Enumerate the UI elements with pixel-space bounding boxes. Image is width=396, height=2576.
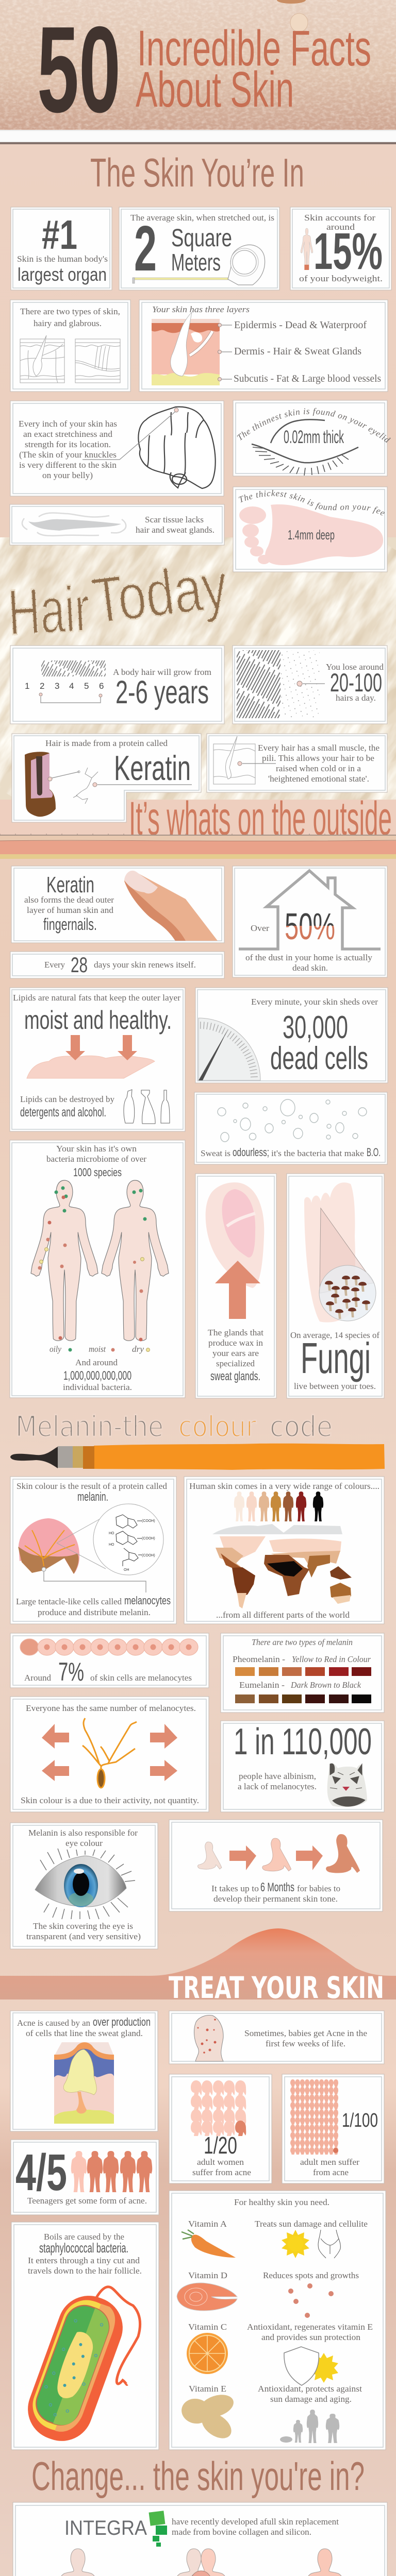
text block: your ears are xyxy=(212,1348,259,1358)
text: have recently developed afull skin replacement xyxy=(172,2517,339,2527)
text: Every minute, your skin sheds over xyxy=(251,997,378,1007)
text: Hair is made from a protein called xyxy=(45,738,168,748)
figure bottom half coloured: 50% xyxy=(285,906,335,947)
icon: bacterium xyxy=(19,2287,140,2450)
meters: Meters xyxy=(171,249,221,276)
vitamin E benefit: Antioxidant, protects against xyxy=(258,2384,362,2394)
panel: stretchiness and knuckles xyxy=(10,401,224,496)
legend: oily xyxy=(50,1344,61,1354)
text: bacteria microbiome of over xyxy=(46,1154,146,1164)
text: On average, 14 species of xyxy=(290,1330,380,1340)
caption: The average skin, when stretched out, is xyxy=(130,213,274,223)
arrow: up xyxy=(215,1261,260,1319)
arrow xyxy=(150,1724,177,1749)
vitamin C benefit: Antioxidant, regenerates vitamin E xyxy=(247,2322,373,2332)
icon: skin cells xyxy=(27,1056,155,1078)
diagram: glabrous skin xyxy=(75,339,120,383)
curved text: The thickest skin is found on your feet xyxy=(238,490,385,515)
label: subcutis: Subcutis - Fat & Large blood vessels xyxy=(234,373,381,384)
text: a lack of melanocytes. xyxy=(238,1782,317,1791)
icon: house xyxy=(239,871,381,949)
text: suffer from acne xyxy=(192,2167,251,2177)
icon: molecule in circle: (COOH) xyxy=(142,1554,155,1557)
text: There are two types of skin, xyxy=(20,307,120,316)
panel: microbiome xyxy=(10,1140,185,1398)
legend: dry xyxy=(132,1344,144,1354)
number: 28 xyxy=(71,953,88,977)
icon: molecule in circle: (COOH) xyxy=(142,1519,155,1523)
panel: 30000 dead cells xyxy=(195,988,388,1083)
text: develop their permanent skin tone. xyxy=(213,1894,338,1904)
silhouettes of skin tones xyxy=(234,1492,323,1521)
skin bump banner: treat your skin xyxy=(0,1928,396,2005)
diagram: follicle xyxy=(213,736,255,784)
text: You lose around xyxy=(326,662,384,672)
text: made from bovine collagen and silicon. xyxy=(172,2527,311,2537)
text: eye colour xyxy=(65,1838,103,1848)
text: from acne xyxy=(313,2167,349,2177)
icon: baby light xyxy=(198,1842,222,1869)
heading: Melanin - the colour code: code xyxy=(270,1410,333,1444)
scale numbers: 3 xyxy=(55,681,59,691)
panel: teenagers acne xyxy=(11,2140,159,2215)
emphasis: moist and healthy. xyxy=(24,1006,172,1035)
text: produce and distribute melanin. xyxy=(38,1607,151,1617)
icon: peanuts xyxy=(179,2391,237,2444)
panel: Integra skin replacement xyxy=(13,2502,387,2576)
text block: is very different to the skin xyxy=(19,460,117,470)
text: Lipids can be destroyed by xyxy=(20,1094,114,1104)
icon: melanocyte xyxy=(82,1718,137,1788)
icon: grid of women xyxy=(191,2080,246,2136)
panel: lipids xyxy=(10,988,185,1131)
spots xyxy=(288,2283,334,2318)
text: Over xyxy=(251,923,269,933)
text: also forms the dead outer xyxy=(24,895,114,905)
figure: 7% xyxy=(58,1657,84,1686)
icon: baby medium xyxy=(262,1838,291,1871)
icon: scar xyxy=(22,513,126,536)
text: ...from all different parts of the world xyxy=(216,1610,350,1620)
caption: Skin accounts for xyxy=(304,213,375,223)
panel: thickest skin feet xyxy=(233,486,388,572)
arrow xyxy=(42,1760,69,1781)
vitamin A benefit: Treats sun damage and cellulite xyxy=(255,2219,368,2229)
pointer: knuckle xyxy=(82,408,178,460)
heading: Hair Today: Hair xyxy=(6,573,91,649)
skin cross-section strip xyxy=(0,834,396,859)
text: of skin cells are melanocytes xyxy=(90,1673,192,1683)
vitamin C benefit second line: and provides sun protection xyxy=(261,2332,360,2342)
diagram: hairy skin xyxy=(20,335,64,383)
emphasis: melanin. xyxy=(77,1490,108,1504)
icon: ages of life xyxy=(280,2410,339,2443)
icon: grid of men xyxy=(290,2079,338,2155)
vitamin E benefit second line: sun damage and aging. xyxy=(270,2394,352,2404)
text: Large tentacle-like cells called xyxy=(16,1597,122,1606)
text: It enters through a tiny cut and xyxy=(28,2256,140,2265)
icon: tape measure xyxy=(133,245,265,285)
icon: carrot xyxy=(182,2230,236,2258)
vitamin D benefit: Reduces spots and growths xyxy=(263,2270,359,2280)
panel: largest organ xyxy=(11,207,112,290)
number two: 2 xyxy=(134,213,157,284)
vitamin D label: Vitamin D xyxy=(188,2270,227,2280)
figure top half dark: 50% xyxy=(285,906,335,947)
panel: 7 percent xyxy=(10,1633,209,1688)
eumelanin label: Eumelanin - xyxy=(239,1680,285,1690)
emphasis: 6 Months xyxy=(260,1880,294,1894)
emphasis: staphylococcal bacteria. xyxy=(39,2240,128,2256)
panel: range of colours xyxy=(184,1477,384,1624)
text block: produce wax in xyxy=(208,1338,263,1348)
largest organ: largest organ xyxy=(18,264,107,285)
arrow xyxy=(150,1760,177,1781)
panel: ear wax glands xyxy=(195,1174,276,1398)
text: Your skin has it's own xyxy=(56,1144,137,1154)
text: dead skin. xyxy=(292,963,328,973)
measurement: 0.02mm thick xyxy=(284,427,344,447)
text: adult men suffer xyxy=(300,2157,359,2167)
text: transparent (and very sensitive) xyxy=(26,1931,141,1941)
text: Sweat is xyxy=(201,1148,230,1158)
vitamin A label: Vitamin A xyxy=(188,2219,227,2229)
icon: molecule in circle: HO xyxy=(109,1543,114,1547)
text: travels down to the hair follicle. xyxy=(28,2266,142,2276)
panel: 15 percent bodyweight xyxy=(290,207,391,290)
eumelanin swatches xyxy=(235,1694,371,1703)
text: Teenagers get some form of acne. xyxy=(27,2196,147,2206)
text block: on your belly) xyxy=(42,470,93,480)
panel: eye colour xyxy=(10,1823,158,1949)
pheomelanin label: Pheomelanin - xyxy=(233,1654,285,1664)
text block: Every hair has a small muscle, the xyxy=(258,743,380,753)
icon: sun xyxy=(282,2230,309,2258)
text: for babies to xyxy=(297,1884,340,1893)
keratin word: Keratin xyxy=(46,872,94,897)
bracket xyxy=(39,693,102,703)
icon: hair strokes xyxy=(41,660,106,676)
pointer xyxy=(42,1567,146,1592)
text: Around xyxy=(24,1673,51,1683)
world map xyxy=(212,1524,352,1608)
title line two: About Skin xyxy=(136,61,294,117)
curved text: The thinnest skin is found on your eyelids xyxy=(237,408,391,443)
text second line: hairy and glabrous. xyxy=(34,318,102,328)
icon: row of cells xyxy=(20,1639,198,1655)
text: It takes up to xyxy=(211,1884,259,1893)
label: dermis: Dermis - Hair & Sweat Glands xyxy=(234,346,361,357)
scale numbers: 6 xyxy=(99,681,104,691)
icon: eye lashes xyxy=(252,419,358,476)
icon: molecule in circle: HO xyxy=(109,1532,114,1535)
eumelanin description: Dark Brown to Black xyxy=(290,1680,361,1690)
vitamin E label: Vitamin E xyxy=(189,2384,226,2394)
legend: moist xyxy=(89,1344,106,1354)
panel: one in a hundred men xyxy=(282,2074,384,2183)
text block xyxy=(258,743,380,784)
icon: bottles xyxy=(124,1090,170,1124)
icon: droplets xyxy=(218,1099,367,1142)
heading: Melanin - the colour code: Melanin-the xyxy=(15,1410,163,1444)
text: Melanin is also responsible for xyxy=(28,1828,138,1838)
text: Lipids are natural fats that keep the outer layer xyxy=(13,993,180,1003)
text block: raised when cold or in a xyxy=(276,764,361,773)
icon: paintbrush xyxy=(10,1444,385,1470)
emphasis: sweat glands. xyxy=(210,1369,260,1383)
heading: There are two types of melanin xyxy=(252,1637,353,1647)
text second line: hair and sweat glands. xyxy=(136,525,214,535)
scale numbers: 5 xyxy=(84,681,89,691)
fingernails word: fingernails. xyxy=(43,915,97,934)
icon: molecule xyxy=(73,768,98,804)
text: of the dust in your home is actually xyxy=(245,953,372,962)
title number: 50 xyxy=(37,2,121,138)
panel: vitamins xyxy=(169,2191,386,2450)
text: A body hair will grow from xyxy=(113,667,211,677)
legend xyxy=(50,1344,150,1354)
vitamin C label: Vitamin C xyxy=(188,2322,227,2332)
figure: body transition xyxy=(164,2549,238,2576)
panel: three layers xyxy=(139,300,388,392)
text: hairs a day. xyxy=(336,693,376,703)
icon: finger xyxy=(124,871,218,941)
icon: foot xyxy=(304,1182,356,1323)
text: Human skin comes in a very wide range of colours.... xyxy=(189,1481,380,1491)
text: Skin colour is the result of a protein called xyxy=(16,1481,167,1491)
panel: 28 days xyxy=(10,952,224,978)
emphasis: 1000 species xyxy=(73,1166,122,1179)
text: people have albinism, xyxy=(239,1771,316,1781)
heading: Hair Today xyxy=(6,550,232,649)
panel: melanin protein xyxy=(10,1477,176,1624)
icon: melanocyte cell section xyxy=(18,1516,106,1574)
icon: orange xyxy=(187,2333,228,2374)
panel: boils xyxy=(11,2222,159,2450)
scale numbers: 4 xyxy=(69,681,74,691)
icon: ear xyxy=(206,1182,264,1288)
pointer xyxy=(297,681,325,686)
panel: fungi xyxy=(287,1174,384,1398)
text block: (The skin of your knuckles xyxy=(19,450,117,460)
scale numbers: 1 xyxy=(25,681,29,691)
figure: original body xyxy=(48,2549,107,2576)
icon: gauge xyxy=(199,1018,260,1080)
icon: teenagers xyxy=(71,2151,152,2192)
text: first few weeks of life. xyxy=(266,2039,345,2048)
icon: molecule in circle xyxy=(93,1504,163,1575)
caption: of your bodyweight. xyxy=(299,274,383,283)
icon: foot xyxy=(239,504,383,565)
heading: Your skin has three layers xyxy=(152,304,250,314)
figure: 1/100 xyxy=(342,2110,378,2131)
text block: an exact stretchiness and xyxy=(23,429,113,439)
icon: cellulite figure xyxy=(318,2230,340,2258)
icon: eye xyxy=(35,1849,135,1919)
text block: specialized xyxy=(216,1359,255,1368)
panel: 2 square meters xyxy=(119,207,279,290)
arrow xyxy=(229,1845,256,1870)
keratin word: Keratin xyxy=(114,749,191,788)
icon: molecule in circle: (COOH) xyxy=(142,1537,155,1540)
panel: babies skin tone xyxy=(169,1820,383,1911)
icon: salmon xyxy=(177,2283,237,2311)
panel: baby acne xyxy=(169,2011,384,2064)
panel: albinism xyxy=(221,1721,384,1812)
pheomelanin swatches xyxy=(235,1667,371,1676)
label: epidermis: Epidermis - Dead & Waterproof xyxy=(234,319,367,331)
arrow xyxy=(65,1035,85,1060)
panel: two types of melanin xyxy=(221,1633,384,1713)
white divider band xyxy=(0,130,396,144)
logo: Integra wordmark: INTEGRA xyxy=(64,2517,147,2539)
icon: baby dark xyxy=(326,1834,360,1873)
emphasis: B.O. xyxy=(367,1146,381,1159)
icon: body xyxy=(301,228,313,270)
text block: 'heightened emotional state'. xyxy=(268,774,369,784)
figure: new body xyxy=(295,2549,354,2576)
figure: front body xyxy=(31,1180,98,1341)
scale numbers: 2 xyxy=(40,681,44,691)
panel: keratin fingernails xyxy=(11,866,224,943)
caption: Skin is the human body's xyxy=(17,254,108,264)
pointer: cross-section xyxy=(48,772,79,781)
arrow xyxy=(296,1845,323,1870)
pheomelanin description: Yellow to Red in Colour xyxy=(292,1654,371,1664)
icon: fist xyxy=(138,407,216,488)
background: hair fur section xyxy=(0,537,396,800)
text block: The glands that xyxy=(208,1328,263,1337)
text block: strength for its location. xyxy=(25,439,111,449)
panel: thinnest skin eyelids xyxy=(233,400,391,476)
figure: 1/20 xyxy=(204,2132,237,2159)
big figure: 30,000 xyxy=(283,1010,348,1045)
heading: Melanin - the colour code: colour xyxy=(178,1410,257,1444)
heading: Hair Today: Today xyxy=(88,550,232,637)
panel: lose hairs xyxy=(233,646,387,724)
icon: hair cross-section xyxy=(25,752,56,817)
text: layer of human skin and xyxy=(27,905,114,915)
heading: For healthy skin you need. xyxy=(234,2197,329,2207)
big figure: 2-6 years xyxy=(116,674,209,710)
panel: scar tissue xyxy=(10,504,224,545)
text block: pili. This allows your hair to be xyxy=(262,753,374,763)
measurement: 1.4mm deep xyxy=(288,527,335,543)
text: And around xyxy=(75,1358,118,1367)
scale numbers xyxy=(25,681,104,691)
icon: sun behind shield xyxy=(284,2347,338,2385)
square: Square xyxy=(171,225,232,252)
emphasis: over production xyxy=(93,2015,151,2028)
text block xyxy=(19,419,117,480)
big figure: 1,000,000,000,000 xyxy=(63,1369,131,1383)
figure: back body xyxy=(102,1180,169,1341)
figure: 4/5 xyxy=(15,2144,67,2201)
text: Scar tissue lacks xyxy=(145,515,204,524)
panel: acne cause xyxy=(10,2011,158,2131)
arrow xyxy=(118,1035,137,1060)
emphasis: detergents and alcohol. xyxy=(20,1105,106,1120)
text: it's the bacteria that make xyxy=(271,1148,364,1158)
panel: hair growth 2-6 years xyxy=(10,646,224,724)
text: individual bacteria. xyxy=(63,1382,132,1392)
icon: baby head xyxy=(194,2015,223,2061)
text: of cells that line the sweat gland. xyxy=(26,2028,143,2038)
text: Acne is caused by an xyxy=(17,2018,90,2028)
text block xyxy=(208,1328,263,1368)
background: outside section bg xyxy=(0,800,396,836)
text: Skin colour is a due to their activity, not quantity. xyxy=(21,1795,199,1805)
header: skin texture banner xyxy=(0,0,396,138)
icon: magnifier with fungi xyxy=(319,1208,376,1321)
text: Every xyxy=(44,960,65,970)
text: adult women xyxy=(197,2157,244,2167)
diagram: acne pore xyxy=(54,2042,114,2124)
text: The skin covering the eye is xyxy=(33,1921,133,1931)
panel: sweat xyxy=(194,1092,387,1164)
diagram: skin layers xyxy=(152,312,220,385)
text: days your skin renews itself. xyxy=(94,960,196,970)
icon: molecule in circle: OH xyxy=(124,1568,129,1572)
text: Sometimes, babies get Acne in the xyxy=(244,2028,367,2038)
pointer xyxy=(238,761,276,766)
icon: falling hairs xyxy=(237,650,320,718)
panel: two types of skin xyxy=(10,300,130,392)
heading: Melanin - the colour code xyxy=(15,1410,333,1444)
emphasis: melanocytes xyxy=(124,1594,171,1607)
panel: house dust xyxy=(233,866,387,977)
text: live between your toes. xyxy=(294,1381,376,1391)
panel: one in twenty women xyxy=(169,2074,272,2183)
panel: hair muscle xyxy=(207,734,387,792)
text block: Every inch of your skin has xyxy=(19,419,117,429)
emphasis: odourless; xyxy=(233,1146,269,1159)
pointer: keratin xyxy=(93,783,192,787)
panel: keratin hair protein xyxy=(12,734,201,822)
logo: green squares xyxy=(149,2511,167,2547)
caption second line: around xyxy=(326,222,355,232)
bacteria dots xyxy=(38,1186,146,1342)
text: Everyone has the same number of melanocytes. xyxy=(26,1703,196,1713)
arrow xyxy=(42,1724,69,1749)
panel: same number of melanocytes xyxy=(10,1697,209,1812)
text: Boils are caused by the xyxy=(44,2232,124,2242)
icon: white tiger xyxy=(327,1764,367,1807)
number one: #1 xyxy=(42,212,77,258)
